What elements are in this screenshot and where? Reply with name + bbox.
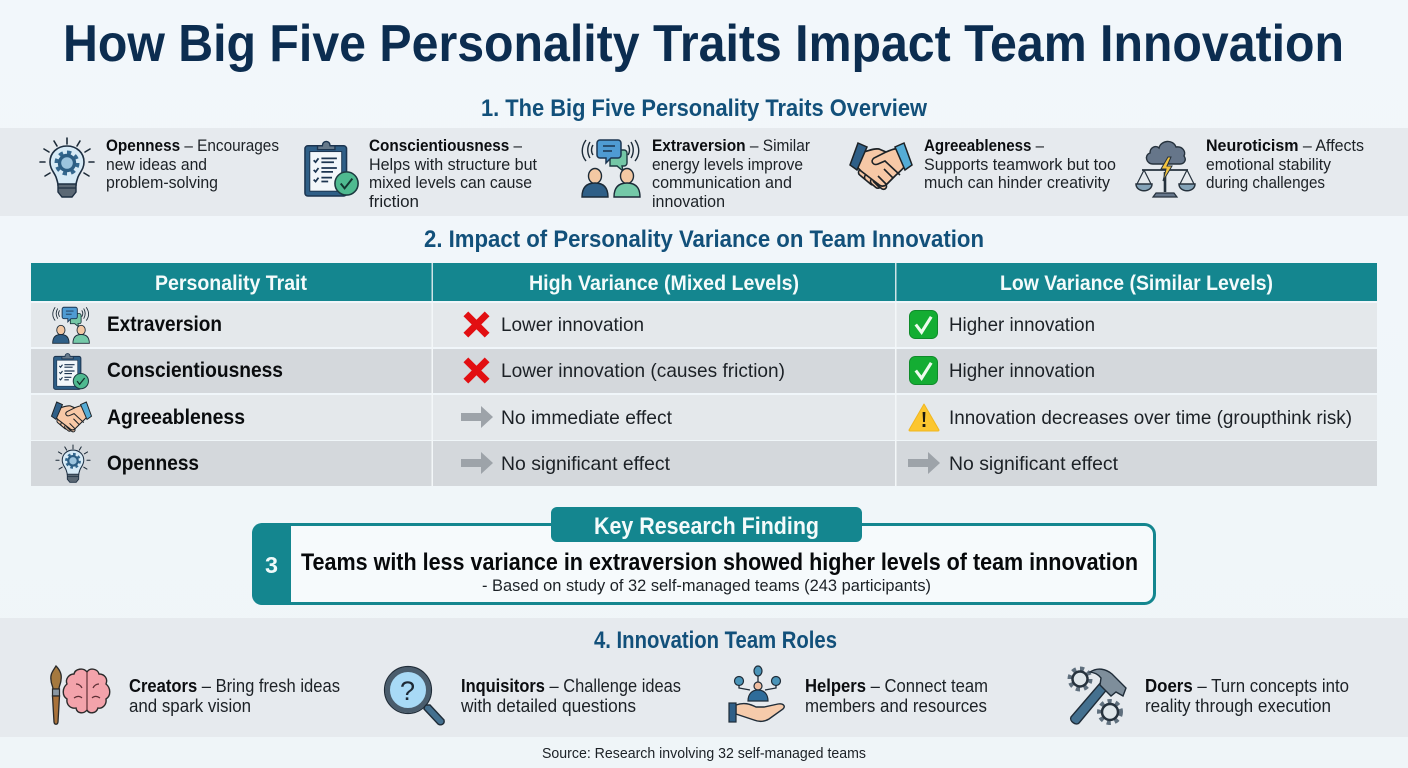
table header: High Variance (Mixed Levels) bbox=[529, 272, 799, 295]
row: openness bbox=[31, 441, 1377, 486]
role: inquisitors: Inquisitors – Challenge ideas bbox=[461, 676, 681, 696]
role: creators bbox=[51, 666, 340, 724]
row: agreeableness bbox=[31, 395, 1377, 440]
row: agreeableness: No immediate effect bbox=[501, 407, 673, 429]
role: helpers bbox=[729, 666, 988, 722]
trait: neuroticism: Neuroticism – Affects bbox=[1206, 136, 1364, 155]
row: conscientiousness: Conscientiousness bbox=[107, 359, 283, 382]
role: inquisitors bbox=[384, 666, 681, 725]
trait: extraversion: innovation bbox=[652, 192, 725, 211]
icon: brush and brain bbox=[51, 666, 110, 724]
role: creators: and spark vision bbox=[129, 696, 251, 716]
title: How Big Five Personality Traits Impact Team Innovation bbox=[63, 15, 1344, 73]
trait: conscientiousness: Conscientiousness – bbox=[369, 136, 522, 155]
trait: agreeableness: much can hinder creativity bbox=[924, 173, 1110, 192]
role: doers: Doers – Turn concepts into bbox=[1145, 676, 1349, 696]
row: extraversion: Lower innovation bbox=[501, 314, 644, 336]
trait: neuroticism bbox=[1136, 136, 1364, 197]
trait: extraversion: communication and bbox=[652, 173, 792, 192]
trait: extraversion: energy levels improve bbox=[652, 155, 803, 174]
role: doers: reality through execution bbox=[1145, 696, 1331, 716]
icon: warning bbox=[909, 404, 939, 431]
row: agreeableness: Agreeableness bbox=[107, 406, 245, 429]
row: extraversion: Extraversion bbox=[107, 313, 222, 336]
trait: conscientiousness: friction bbox=[369, 192, 419, 211]
trait: extraversion bbox=[582, 136, 810, 211]
table: personality variance bbox=[31, 263, 1377, 486]
icon: magnifier: ? bbox=[400, 676, 415, 706]
trait: extraversion: Extraversion – Similar bbox=[652, 136, 810, 155]
table header bbox=[31, 263, 1377, 301]
panel: traits overview bbox=[0, 128, 1408, 216]
icon: magnifier bbox=[384, 666, 444, 725]
table header: Low Variance (Similar Levels) bbox=[1000, 272, 1273, 295]
callout: key research finding bbox=[252, 507, 1154, 605]
row: openness: No significant effect bbox=[501, 453, 671, 475]
heading: section 4: 4. Innovation Team Roles bbox=[594, 627, 837, 654]
role: helpers: members and resources bbox=[805, 696, 987, 716]
icon: hammer and gears bbox=[1070, 669, 1126, 724]
trait: agreeableness bbox=[850, 136, 1116, 192]
icon: hand and network bbox=[729, 666, 784, 722]
row: conscientiousness: Lower innovation (causes friction) bbox=[501, 360, 785, 382]
source note: Source: Research involving 32 self-managed teams bbox=[542, 746, 866, 762]
row: conscientiousness: Higher innovation bbox=[949, 360, 1095, 382]
trait: conscientiousness: Helps with structure but bbox=[369, 155, 537, 174]
trait: openness: new ideas and bbox=[106, 155, 207, 174]
trait: openness: problem-solving bbox=[106, 173, 218, 192]
role: helpers: Helpers – Connect team bbox=[805, 676, 988, 696]
trait: conscientiousness: mixed levels can cause bbox=[369, 173, 532, 192]
role: inquisitors: with detailed questions bbox=[460, 696, 636, 716]
callout number: 3 bbox=[265, 552, 278, 578]
row: extraversion bbox=[31, 303, 1377, 347]
callout tab: Key Research Finding bbox=[594, 513, 819, 540]
row: conscientiousness bbox=[31, 349, 1377, 393]
row: agreeableness: Innovation decreases over time (groupthink risk) bbox=[949, 407, 1352, 429]
trait: agreeableness: Supports teamwork but too bbox=[924, 155, 1116, 174]
heading: section 1: 1. The Big Five Personality Traits Overview bbox=[481, 95, 927, 122]
callout sub text: - Based on study of 32 self-managed teams (243 participants) bbox=[482, 576, 931, 595]
trait: conscientiousness bbox=[305, 136, 537, 211]
callout main text: Teams with less variance in extraversion showed higher levels of team innovation bbox=[301, 549, 1138, 576]
callout tab bbox=[551, 507, 862, 542]
trait: openness bbox=[40, 136, 279, 197]
trait: agreeableness: Agreeableness – bbox=[924, 136, 1044, 155]
role: creators: Creators – Bring fresh ideas bbox=[129, 676, 340, 696]
trait: neuroticism: emotional stability bbox=[1206, 155, 1331, 174]
row: extraversion: Higher innovation bbox=[949, 314, 1095, 336]
heading: section 2: 2. Impact of Personality Variance on Team Innovation bbox=[424, 226, 984, 253]
panel: innovation team roles bbox=[0, 618, 1408, 737]
row: openness: Openness bbox=[107, 452, 199, 475]
trait: neuroticism: during challenges bbox=[1206, 173, 1325, 192]
row: openness: No significant effect bbox=[949, 453, 1119, 475]
trait: openness: Openness – Encourages bbox=[106, 136, 279, 155]
table header: Personality Trait bbox=[155, 272, 307, 295]
role: doers bbox=[1070, 669, 1349, 724]
